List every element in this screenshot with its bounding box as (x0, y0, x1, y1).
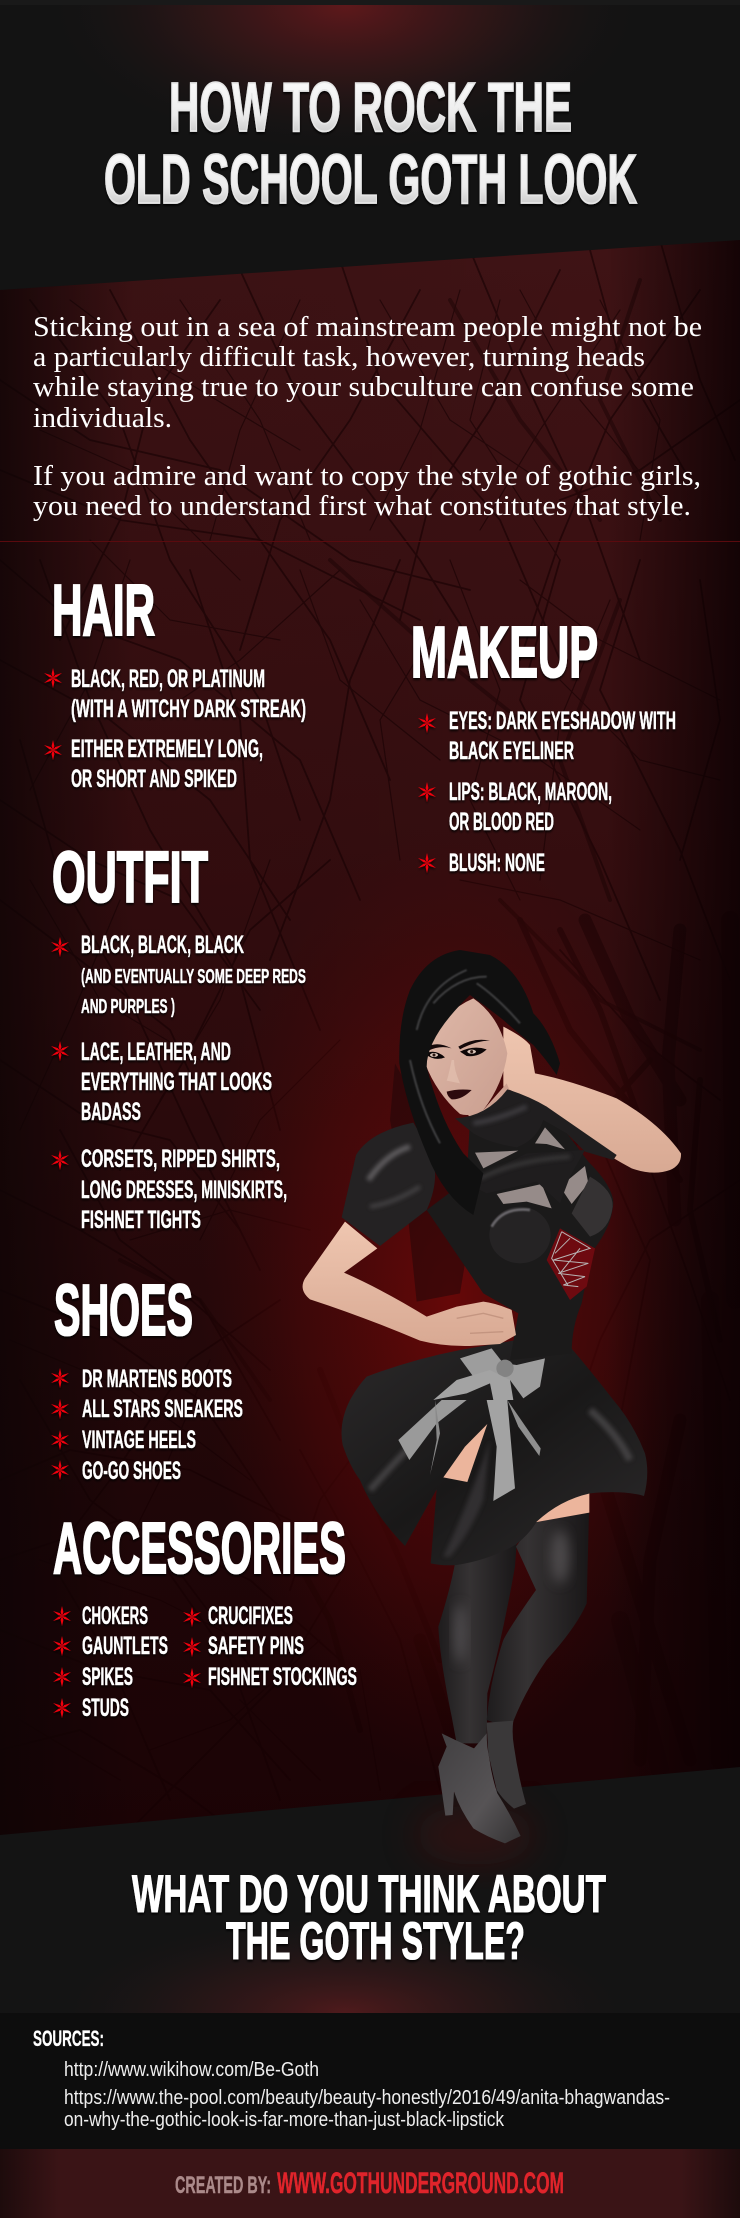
shoes item 4: GO-GO SHOES (82, 1457, 181, 1485)
back hair shadow (390, 1063, 477, 1302)
intro text: Sticking out in a sea of mainstream people might not be (33, 312, 702, 343)
icon: bullet star (53, 1667, 71, 1687)
accessory item: GAUNTLETS (82, 1632, 168, 1660)
back boot (487, 1721, 526, 1809)
icon: bullet star (183, 1668, 201, 1688)
outfit bullet 1: AND PURPLES ) (81, 996, 175, 1018)
hair bullet 1: BLACK, RED, OR PLATINUM (71, 665, 265, 693)
raised arm (503, 1027, 681, 1173)
credit label: CREATED BY: (175, 2172, 271, 2199)
source links: https://www.the-pool.com/beauty/beauty-honestly/2016/49/anita-bhagwandas- (64, 2087, 670, 2109)
icon: bullet star (418, 782, 436, 802)
heading: accessories: ACCESSORIES (53, 1509, 346, 1589)
intro text: while staying true to your subculture can confuse some (33, 372, 694, 403)
skin slit (443, 1424, 487, 1482)
back stocking band (436, 1483, 467, 1540)
icon: bullet star (51, 1368, 69, 1388)
shoes item 2: ALL STARS SNEAKERS (82, 1395, 243, 1423)
intro text: a particularly difficult task, however, turning heads (33, 342, 645, 373)
arm on hip (303, 1222, 516, 1346)
lips (447, 1089, 472, 1099)
heading: outfit: OUTFIT (52, 838, 208, 918)
hair (399, 950, 560, 1215)
outfit bullet 2 (81, 1038, 272, 1126)
outfit bullet 2: EVERYTHING THAT LOOKS (81, 1068, 272, 1096)
accessory item: FISHNET STOCKINGS (208, 1663, 357, 1691)
section: makeup (411, 613, 676, 877)
intro text (33, 312, 702, 522)
icon: bullet star (51, 1430, 69, 1450)
panel: sources (0, 2013, 740, 2149)
outfit bullet 3 (81, 1145, 287, 1234)
puff sleeve (342, 1123, 435, 1246)
source links: on-why-the-gothic-look-is-far-more-than-just-black-lipstick (64, 2109, 505, 2131)
accessory item: CRUCIFIXES (208, 1602, 293, 1630)
icon: bullet star (51, 937, 69, 957)
panel: footer credit (0, 2149, 740, 2218)
icon: bullet star (51, 1399, 69, 1419)
illustration: goth woman (303, 950, 681, 1843)
section: outfit (51, 838, 306, 1234)
skirt (341, 1340, 647, 1565)
hair bullet 2: OR SHORT AND SPIKED (71, 765, 237, 793)
icon: bullet star (183, 1607, 201, 1627)
outfit bullet 1 (81, 931, 306, 1018)
source links: http://www.wikihow.com/Be-Goth (64, 2059, 319, 2081)
skin above stocking front (533, 1493, 589, 1523)
intro text: you need to understand first what constitutes that style. (33, 491, 691, 522)
makeup bullet 3: BLUSH: NONE (449, 849, 545, 877)
icon: bullet star (53, 1698, 71, 1718)
accessory item: STUDS (82, 1694, 129, 1722)
accessory item: CHOKERS (82, 1602, 148, 1630)
heading: hair: HAIR (52, 571, 155, 651)
intro text: If you admire and want to copy the style of gothic girls, (33, 461, 701, 492)
icon: bullet star (51, 1041, 69, 1061)
heading: makeup: MAKEUP (411, 613, 598, 693)
bust right (572, 1177, 613, 1237)
accessory item: SPIKES (82, 1663, 133, 1691)
icon: bullet star (418, 853, 436, 873)
heading: shoes: SHOES (54, 1271, 193, 1351)
scarf (455, 1089, 617, 1160)
makeup bullet 1 (449, 707, 676, 765)
source links (64, 2059, 670, 2131)
bare tree branches texture (0, 240, 740, 1830)
outfit bullet 2: LACE, LEATHER, AND (81, 1038, 231, 1066)
lower body (341, 1340, 647, 1843)
corset lacing (547, 1228, 595, 1300)
outfit bullet 2: BADASS (81, 1098, 141, 1126)
upper body (303, 950, 681, 1400)
hair bullet 2: EITHER EXTREMELY LONG, (71, 735, 263, 763)
torso dress (427, 1107, 613, 1360)
icon: bullet star (51, 1150, 69, 1170)
nose highlight (447, 1060, 460, 1083)
sources heading: SOURCES: (33, 2026, 104, 2051)
outfit bullet 3: FISHNET TIGHTS (81, 1206, 201, 1234)
intro text: individuals. (33, 403, 172, 434)
figure glow (200, 830, 700, 1770)
bust left (489, 1207, 551, 1263)
makeup bullet 2: OR BLOOD RED (449, 808, 554, 836)
icon: bullet star (44, 740, 62, 760)
eyes (425, 1048, 487, 1059)
icon: bullet star (418, 713, 436, 733)
outfit bullet 3: CORSETS, RIPPED SHIRTS, (81, 1145, 280, 1173)
icon: bullet star (51, 1460, 69, 1480)
section: shoes (51, 1271, 243, 1485)
face (425, 998, 507, 1115)
torn scarf strip (467, 1150, 585, 1203)
closing question (132, 1865, 606, 1971)
icon: bullet star (53, 1606, 71, 1626)
icon: bullet star (183, 1637, 201, 1657)
front boot (438, 1733, 521, 1843)
closing question: THE GOTH STYLE? (226, 1912, 525, 1971)
makeup bullet 2 (449, 778, 612, 836)
section: hair (44, 571, 306, 793)
icon: bullet star (53, 1636, 71, 1656)
shoes item 1: DR MARTENS BOOTS (82, 1365, 232, 1393)
front leg (487, 1513, 589, 1728)
title (104, 68, 637, 218)
section: accessories (53, 1509, 357, 1722)
makeup bullet 1: BLACK EYELINER (449, 737, 574, 765)
hair bullet 1: (WITH A WITCHY DARK STREAK) (71, 695, 306, 723)
makeup bullet 2: LIPS: BLACK, MAROON, (449, 778, 612, 806)
ribbon tails (398, 1400, 467, 1460)
eyebrows (427, 1040, 490, 1051)
hair bullet 1 (71, 665, 306, 723)
panel: red forest background (0, 230, 740, 1850)
icon: bullet star (44, 668, 62, 688)
hair bullet 2 (71, 735, 263, 793)
bow (460, 1348, 545, 1398)
lace patches (475, 1127, 588, 1208)
outfit bullet 3: LONG DRESSES, MINISKIRTS, (81, 1176, 287, 1204)
outfit bullet 1: BLACK, BLACK, BLACK (81, 931, 244, 959)
shoes item 3: VINTAGE HEELS (82, 1426, 196, 1454)
accessory item: SAFETY PINS (208, 1632, 304, 1660)
outfit bullet 1: (AND EVENTUALLY SOME DEEP REDS (81, 966, 306, 988)
neck (457, 1083, 517, 1127)
back leg (438, 1543, 517, 1743)
panel: lower question band (0, 1767, 740, 2113)
panel: title header band (0, 0, 740, 290)
